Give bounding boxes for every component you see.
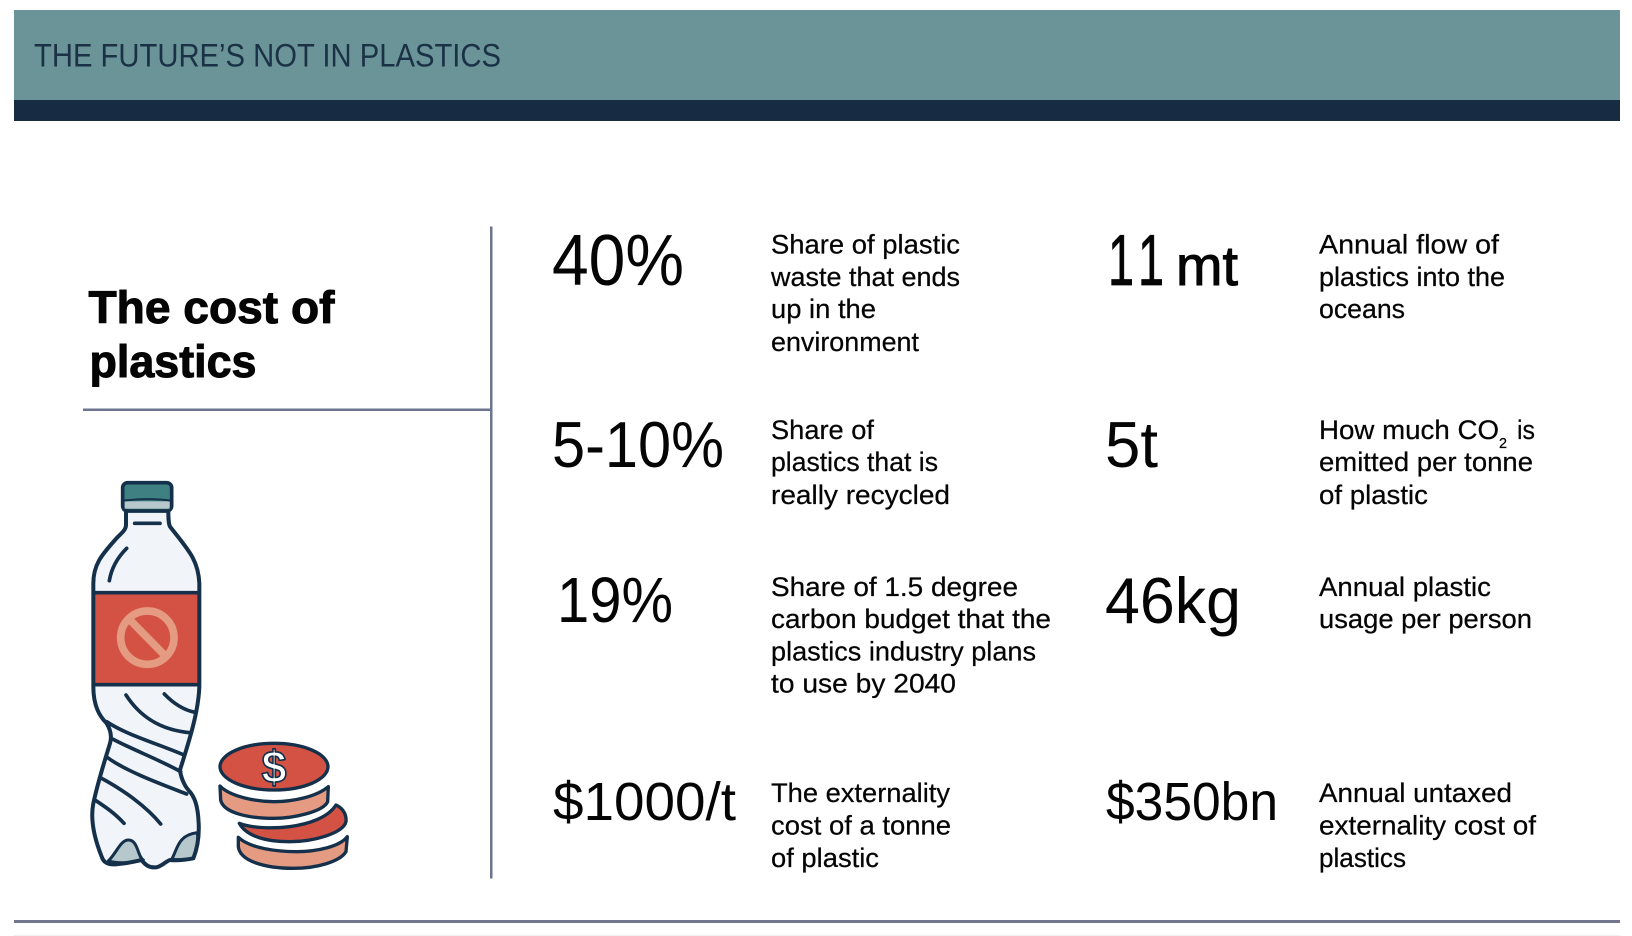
description: externality cost of <box>1319 810 1537 840</box>
stat: $350bn <box>1106 772 1537 873</box>
description: is <box>1517 415 1535 445</box>
description: usage per person <box>1319 604 1532 634</box>
description <box>1319 572 1532 634</box>
panel heading: the cost of plastics: plastics <box>90 336 256 387</box>
description: The externality <box>771 778 950 808</box>
stat: $350bn: $350bn <box>1106 772 1278 832</box>
description: to use by 2040 <box>771 668 956 698</box>
description: emitted per tonne <box>1319 447 1533 477</box>
stat: 11 mt: mt <box>1176 234 1238 297</box>
stat: 46kg: 46kg <box>1105 564 1241 637</box>
stat: 19% <box>557 564 1051 698</box>
description <box>1319 415 1535 510</box>
description: cost of a tonne <box>771 810 951 840</box>
stat: 40%: 40% <box>552 221 684 301</box>
stat: 5-10% <box>552 408 950 510</box>
icon: plastic bottle with no-entry label <box>92 483 199 867</box>
panel heading: the cost of plastics <box>88 282 336 387</box>
description: plastics into the <box>1319 262 1505 292</box>
description: of plastic <box>771 843 879 873</box>
description: plastics <box>1319 843 1406 873</box>
panel heading: the cost of plastics: The cost of <box>88 282 336 333</box>
description <box>770 230 960 357</box>
description: really recycled <box>771 480 950 510</box>
stat: 5-10%: 5-10% <box>552 408 724 481</box>
description: Annual flow of <box>1319 230 1500 260</box>
description: of plastic <box>1319 480 1428 510</box>
description <box>771 415 950 510</box>
stat: $1000/t <box>553 772 951 873</box>
description: environment <box>771 327 919 357</box>
description: plastics industry plans <box>771 636 1036 666</box>
description: How much CO <box>1319 415 1499 445</box>
stat: 5t: 5t <box>1105 408 1158 481</box>
description <box>1319 230 1505 324</box>
stat: 46kg <box>1105 564 1532 637</box>
description: 2 <box>1499 435 1507 452</box>
description <box>1319 778 1537 873</box>
title: THE FUTURE’S NOT IN PLASTICS <box>34 38 501 74</box>
description: carbon budget that the <box>771 604 1051 634</box>
icon: stack of dollar coins <box>220 742 347 868</box>
description: waste that ends <box>770 262 960 292</box>
stat: 11 mt: 1 <box>1108 221 1134 301</box>
description: Share of <box>771 415 874 445</box>
description <box>771 572 1051 698</box>
description: Annual untaxed <box>1319 778 1512 808</box>
header banner <box>14 10 1620 121</box>
description: oceans <box>1319 294 1405 324</box>
description: Share of 1.5 degree <box>771 572 1018 602</box>
stat: 11 mt <box>1108 221 1505 324</box>
description: up in the <box>771 294 876 324</box>
icon: stack of dollar coins: $ <box>261 742 287 793</box>
stat: 40% <box>552 221 960 357</box>
stat: 19%: 19% <box>557 564 673 636</box>
stat: $1000/t: $1000/t <box>553 772 736 832</box>
description: plastics that is <box>771 447 938 477</box>
description: Annual plastic <box>1319 572 1491 602</box>
stat: 11 mt: 1 <box>1138 221 1164 301</box>
description <box>771 778 951 873</box>
description: Share of plastic <box>771 230 960 260</box>
stat: 5t <box>1105 408 1535 510</box>
